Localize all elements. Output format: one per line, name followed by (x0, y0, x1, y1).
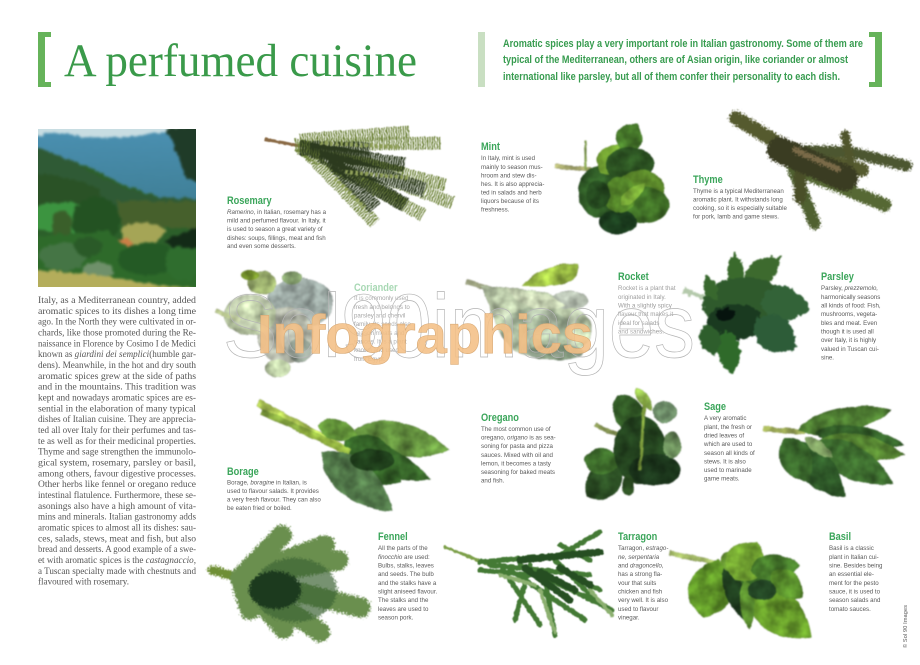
Oregano text: seasoning for baked meats (481, 469, 555, 476)
body text: te as well as for their medicinal properties. (38, 436, 196, 447)
Parsley text: Parsley (821, 271, 854, 283)
Sage text: game meats. (704, 475, 740, 483)
Mint text: mainly to season mus- (481, 164, 543, 171)
Rosemary text: mild and perfumed flavour. In Italy, it (227, 217, 326, 225)
body text: Other herbs like fennel or oregano reduce (38, 479, 196, 490)
Thyme text: Thyme is a typical Mediterranean (693, 188, 784, 195)
Tarragon text: vour that suits (618, 580, 656, 587)
Basil text: sauce, it is used to (829, 588, 881, 596)
body text: ted all over Italy for their perfumes and tas- (38, 425, 196, 436)
Rocket text: Rocket (618, 271, 649, 283)
Fennel text: finocchio are used: (378, 554, 430, 561)
Parsley text: all kinds of food: Fish, (821, 302, 881, 310)
body text: dishes of Italian cuisine. They are apprecia- (38, 414, 196, 425)
Coriander text: It is commonly used (354, 295, 409, 302)
Rosemary text: is used to season a great variety of (227, 226, 323, 233)
Tarragon text: chicken and fish (618, 588, 663, 596)
Rocket text: originated in Italy. (618, 294, 666, 301)
body text: gical system, rosemary, parsley or basil, (38, 458, 196, 468)
herb: borage (258, 403, 452, 526)
body text: intestinal flatulence. Furthermore, these se- (38, 490, 196, 501)
Parsley text (821, 271, 881, 362)
Tarragon text: and dragoncello, (618, 562, 664, 570)
Coriander text: known and used (354, 347, 399, 354)
Oregano text: sauces. Mixed with oil and (481, 452, 553, 459)
Basil text: Basil is a classic (829, 545, 874, 552)
herb: basil (670, 532, 824, 655)
Basil text: an essential ele- (829, 571, 874, 578)
Coriander text: fresh and belongs to (354, 304, 410, 311)
body text: and in the mountains. This tradition was (38, 383, 196, 393)
body text: aromatic spices to almost all its dishes: sau- (38, 523, 196, 533)
title bracket left (38, 32, 51, 87)
Coriander text: parsley and chervil (354, 312, 405, 320)
Mint text (481, 141, 544, 214)
body text: known as giardini dei semplici(humble gar- (38, 349, 196, 360)
herb: rosemary (264, 132, 453, 223)
Fennel text: and seeds. The bulb (378, 571, 434, 578)
Borage text: Borage, boragine in Italian, is (227, 479, 307, 487)
herb: thyme (736, 118, 908, 225)
Mint text: liquors because of its (481, 198, 539, 205)
Basil text: plant in Italian cui- (829, 554, 879, 561)
Sage text: dried leaves of (704, 432, 744, 440)
body text (38, 296, 196, 588)
Rocket text: flavour that makes it (618, 311, 673, 318)
herb: mint (555, 117, 669, 234)
Basil text: Basil (829, 531, 851, 543)
Borage text: used to flavour salads. It provides (227, 488, 319, 495)
Fennel text: slight aniseed flavour. (378, 588, 438, 596)
Parsley text: harmonically seasons (821, 294, 880, 301)
Oregano text: The most common use of (481, 426, 551, 433)
Basil text: sine. Besides being (829, 562, 883, 570)
body text: dens). Meanwhile, in the hot and dry south (38, 360, 196, 371)
Rocket text: and sandwiches. (618, 328, 664, 336)
title: A perfumed cuisine (64, 35, 417, 87)
herb: oregano (576, 385, 681, 509)
Fennel text: All the parts of the (378, 545, 428, 552)
Oregano text (481, 412, 556, 485)
Tarragon text: Tarragon (618, 531, 657, 543)
body text: aromatic spices grew at the side of paths (38, 371, 196, 382)
Mint text: In Italy, mint is used (481, 155, 535, 162)
Coriander text (354, 282, 411, 363)
Tarragon text: has a strong fla- (618, 571, 662, 578)
Mint text: hes. It is also apprecia- (481, 181, 544, 188)
Rosemary text: dishes: soups, fillings, meat and fish (227, 235, 326, 242)
Fennel text: Bulbs, stalks, leaves (378, 562, 434, 570)
Basil text: season salads and (829, 597, 881, 604)
body text: aromatic spices to its dishes a long time (38, 307, 196, 317)
Coriander text: season meats and (354, 330, 405, 337)
Sage text: plant, the fresh or (704, 424, 752, 431)
Fennel text: Fennel (378, 531, 408, 543)
Tarragon text: very well. It is also (618, 597, 668, 604)
Rosemary text: and even some desserts. (227, 243, 296, 250)
body text: sential in the elaboration of many typical (38, 403, 196, 414)
Sage text: stews. It is also (704, 458, 746, 466)
body text: et with aromatic spices is the castagnaccio, (38, 556, 196, 566)
Fennel text: and the stalks have a (378, 580, 437, 587)
Mint text: ted in salads and herb (481, 189, 542, 197)
body text: naissance in Florence by Cosimo I de Medici (38, 339, 196, 349)
Tarragon text: used to flavour (618, 606, 658, 613)
Coriander text: from Egypt. (354, 356, 386, 363)
Rocket text: Rocket is a plant that (618, 285, 676, 292)
body text: flavoured with rosemary. (38, 577, 129, 588)
body text: a Tuscan specialty made with chestnuts and (38, 567, 196, 577)
Rocket text: With a slightly spicy (618, 302, 673, 310)
intro text (503, 38, 863, 83)
herb: coriander (216, 270, 333, 377)
Rosemary text: Rosemary (227, 195, 272, 207)
Fennel text: season pork. (378, 614, 414, 622)
intro text: international like parsley, but all of them confer their personality to each dish. (503, 71, 840, 83)
herb: sage (763, 398, 907, 509)
Oregano text: oregano, origano is as sea- (481, 434, 556, 442)
Borage text: Borage (227, 466, 259, 478)
Thyme text: cooking, so it is especially suitable (693, 205, 787, 212)
Fennel text: leaves are used to (378, 606, 429, 613)
copyright: © Sol 90 Images (902, 605, 909, 648)
Borage text: a very fresh flavour. They can also (227, 496, 321, 504)
herb: rocket (466, 264, 592, 360)
Tarragon text: vinegar. (618, 614, 640, 622)
herb: fennel (212, 535, 362, 632)
Rosemary text: Ramerino, in Italian, rosemary has a (227, 209, 326, 216)
Sage text: Sage (704, 401, 726, 413)
body text: ago. In the North they were cultivated in or- (38, 318, 196, 328)
body text: kept and nowadays aromatic spices are es- (38, 394, 196, 404)
Thyme text (693, 174, 787, 221)
herb: tarragon (445, 532, 612, 635)
Parsley text: sine. (821, 354, 834, 362)
Tarragon text: Tarragon, estrago- (618, 545, 668, 552)
Fennel text: The stalks and the (378, 597, 429, 604)
Mint text: hroom and stew dis- (481, 172, 537, 180)
Mint text: freshness. (481, 206, 510, 214)
Parsley text: over Italy, it is highly (821, 337, 877, 344)
Rosemary text (227, 195, 326, 250)
Sage text: A very aromatic (704, 415, 746, 422)
Basil text: ment for the pesto (829, 580, 879, 587)
Coriander text: family. Its seeds also (354, 321, 411, 328)
Mint text: Mint (481, 141, 501, 153)
intro text: typical of the Mediterranean, others are of Asian origin, like coriander or almost (503, 54, 848, 66)
body text: mins and minerals. Italian gastronomy adds (38, 513, 196, 523)
Sage text: used to marinade (704, 467, 752, 474)
Tarragon text: ne, serpentaria (618, 554, 660, 561)
Thyme text: Thyme (693, 174, 723, 186)
Oregano text: lemon, it becomes a tasty (481, 460, 552, 468)
Parsley text: Parsley, prezzemolo, (821, 285, 878, 292)
Parsley text: though it is used all (821, 328, 874, 336)
Oregano text: and fish. (481, 477, 505, 485)
Sage text: which are used to (703, 441, 753, 448)
Parsley text: mushrooms, vegeta- (821, 311, 877, 318)
Rocket text (618, 271, 676, 336)
Oregano text: Oregano (481, 412, 519, 424)
Coriander text: Coriander (354, 282, 398, 294)
Tarragon text (618, 531, 668, 622)
watermark: outlined wordmark: Sol90images (223, 277, 695, 377)
body text: chards, like those promoted during the Re- (38, 328, 196, 338)
body text: bread and desserts. A good example of a swe- (38, 544, 196, 555)
body text: Italy, as a Mediterranean country, added (38, 296, 196, 306)
watermark: orange wordmark: Infographics (257, 303, 593, 365)
Basil text (829, 531, 883, 613)
body text: asonings also have a high amount of vita- (38, 501, 196, 512)
body text: ces, salads, stews, meat and fish, but also (38, 533, 196, 544)
Thyme text: for pork, lamb and game stews. (693, 213, 779, 221)
intro bar (478, 32, 485, 87)
Fennel text (378, 531, 438, 622)
Sage text (703, 401, 755, 483)
Oregano text: soning for pasta and pizza (481, 443, 553, 450)
Parsley text: valued in Tuscan cui- (821, 346, 879, 353)
intro bracket right (869, 32, 882, 87)
Thyme text: aromatic plant. It withstands long (693, 196, 783, 204)
Parsley text: bles and meat. Even (821, 320, 878, 327)
body text: Thyme and sage strengthen the immunolo- (38, 448, 196, 458)
Borage text: be eaten fried or boiled. (227, 505, 292, 512)
landscape photo (28, 119, 206, 297)
Borage text (227, 466, 321, 512)
Rocket text: ideal for salads (618, 320, 659, 327)
Sage text: season all kinds of (704, 450, 755, 457)
Coriander text: sauces. It is a plant (354, 338, 407, 346)
Basil text: tomato sauces. (829, 606, 871, 613)
herb: parsley (683, 247, 812, 376)
body text: among others, favour digestive processes. (38, 468, 196, 479)
